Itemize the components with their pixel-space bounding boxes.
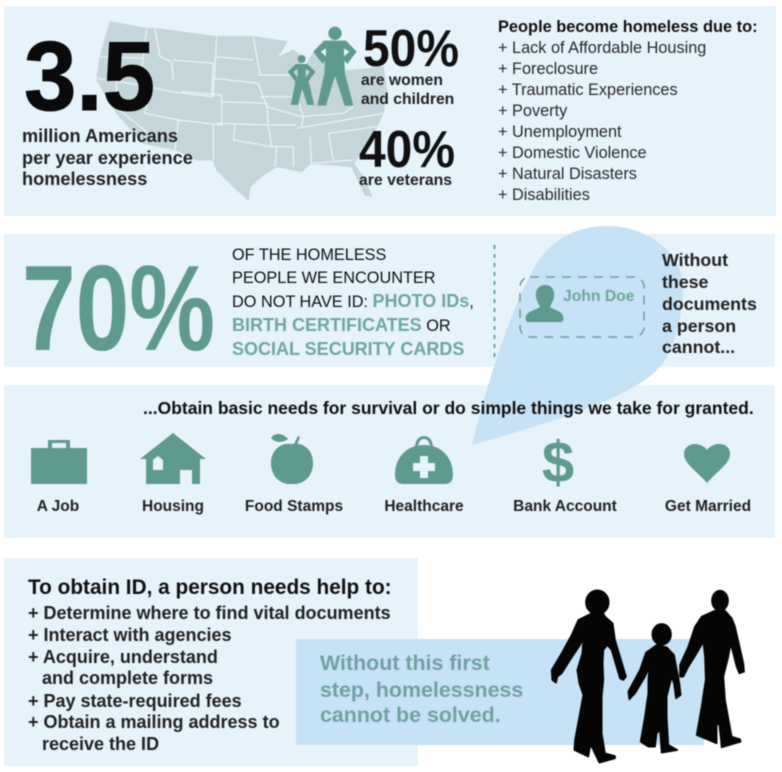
text: million Americans: homelessness — [22, 169, 147, 189]
list: causes of homelessness: + Domestic Violence — [498, 144, 647, 162]
big number 3.5: 3.5 — [24, 21, 155, 131]
panel: missing ID — [4, 234, 775, 367]
list: help needed: + Acquire, understand — [28, 647, 218, 667]
map of the United States — [97, 22, 387, 200]
panel: basic needs — [4, 385, 775, 538]
callout text: Without this first — [320, 651, 490, 675]
list: causes of homelessness: + Foreclosure — [498, 60, 598, 78]
stat: 40 percent: are veterans — [359, 172, 452, 189]
heading: basic needs: ...Obtain basic needs for survival or do simple things we take for granted. — [143, 398, 754, 418]
ID card — [520, 277, 644, 337]
list: causes of homelessness: + Natural Disasters — [498, 165, 637, 183]
silhouette: woman — [552, 590, 626, 763]
labels: basic needs: Bank Account — [513, 498, 617, 515]
list: help needed: + Determine where to find vital documents — [28, 603, 391, 623]
text: ID statement: OF THE HOMELESS — [232, 246, 387, 264]
list: causes of homelessness: People become homeless due to: — [498, 18, 758, 36]
list: causes of homelessness — [498, 18, 758, 204]
icon: adult figure — [313, 27, 357, 106]
text: million Americans — [22, 126, 193, 189]
icon: child figure — [288, 55, 315, 105]
card name: John Doe — [563, 288, 635, 305]
text: without these documents: cannot... — [662, 337, 735, 357]
list: causes of homelessness: + Lack of Affordable Housing — [498, 39, 706, 57]
labels: basic needs: Get Married — [665, 498, 751, 515]
labels: basic needs: Food Stamps — [245, 498, 343, 515]
text: million Americans: per year experience — [22, 148, 193, 168]
icon: dollar sign: $ — [542, 430, 574, 495]
text: without these documents — [662, 250, 757, 357]
labels: basic needs: Housing — [142, 498, 204, 515]
stat: 50 percent: are women — [361, 72, 443, 89]
silhouette: child — [628, 624, 681, 753]
text: ID statement: DO NOT HAVE ID: PHOTO IDs, — [232, 291, 474, 311]
text: without these documents: Without — [662, 250, 728, 270]
text: million Americans: million Americans — [22, 126, 178, 146]
text: ID statement: BIRTH CERTIFICATES OR — [232, 315, 451, 335]
list: causes of homelessness: + Traumatic Experiences — [498, 81, 678, 99]
heading: obtain ID: To obtain ID, a person needs help to: — [28, 576, 392, 599]
list: help needed — [28, 603, 391, 754]
list: causes of homelessness: + Unemployment — [498, 123, 622, 141]
callout text — [320, 651, 523, 727]
stat: 50 percent: and children — [361, 91, 454, 108]
icon: apple — [271, 434, 313, 484]
text: without these documents: a person — [662, 316, 736, 336]
text: without these documents: these — [662, 272, 709, 292]
silhouette: man — [680, 591, 744, 747]
labels: basic needs — [37, 498, 751, 515]
stat: 50 percent — [361, 20, 459, 108]
speech bubble — [472, 226, 683, 445]
text: ID statement — [232, 246, 474, 359]
icon: medical bag — [395, 436, 453, 484]
stat: 40 percent: 40% — [359, 121, 455, 179]
list: help needed: + Pay state-required fees — [28, 691, 242, 711]
list: help needed: + Interact with agencies — [28, 625, 232, 645]
panel: national statistics — [4, 6, 776, 216]
icon: person — [526, 285, 563, 322]
list: causes of homelessness: + Disabilities — [498, 186, 590, 204]
callout band — [296, 639, 704, 745]
list: causes of homelessness: + Poverty — [498, 102, 568, 120]
icon: briefcase — [31, 440, 87, 484]
list: help needed: + Obtain a mailing address to — [28, 712, 280, 732]
list: help needed: and complete forms — [42, 668, 213, 688]
text: ID statement: PEOPLE WE ENCOUNTER — [232, 269, 436, 287]
silhouette: family walking — [552, 590, 744, 763]
big number 70 percent: 70% — [22, 240, 215, 376]
labels: basic needs: A Job — [37, 498, 79, 515]
text: without these documents: documents — [662, 294, 757, 314]
stat: 50 percent: 50% — [363, 20, 459, 78]
text: ID statement: SOCIAL SECURITY CARDS — [232, 339, 464, 359]
callout text: cannot be solved. — [320, 703, 501, 727]
list: help needed: receive the ID — [42, 734, 159, 754]
labels: basic needs: Healthcare — [384, 498, 464, 515]
icon: house — [140, 433, 206, 484]
icon: heart — [684, 444, 730, 483]
callout text: step, homelessness — [320, 678, 523, 702]
panel: obtaining ID — [4, 558, 418, 766]
